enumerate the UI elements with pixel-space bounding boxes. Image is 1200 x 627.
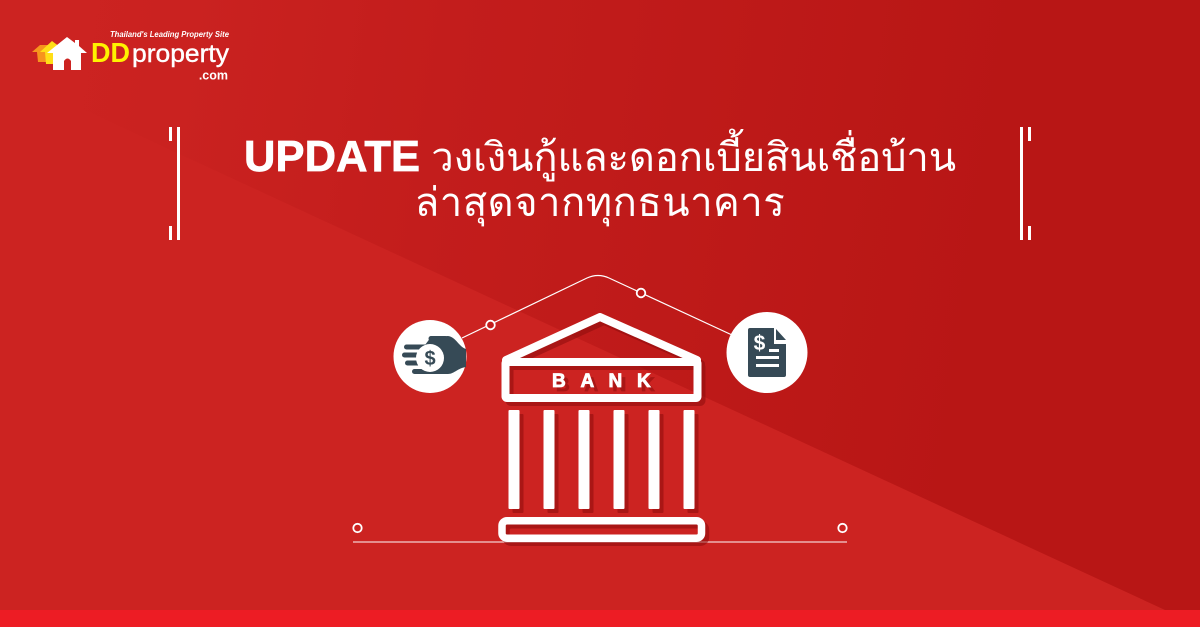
icon: hand with coin: $ [424, 348, 436, 370]
bottom stripe [0, 610, 1200, 627]
icon: houses [32, 37, 87, 70]
title line 2: ล่าสุดจากทุกธนาคาร [415, 181, 785, 225]
icon: document: $ [754, 332, 766, 355]
connector line [462, 276, 732, 338]
title line 1: UPDATE วงเงินกู้และดอกเบี้ยสินเชื่อบ้าน [244, 133, 956, 181]
title [244, 128, 956, 226]
logo [32, 29, 230, 82]
title brackets [169, 127, 1031, 240]
bank label: BANK [552, 371, 651, 392]
bank building [502, 317, 702, 538]
icon: document [726, 312, 808, 393]
logo suffix: .com [199, 68, 228, 82]
columns [508, 410, 694, 509]
logo: property [132, 40, 230, 68]
pediment [506, 317, 697, 360]
logo tagline: Thailand's Leading Property Site [110, 29, 229, 39]
base plinth [502, 521, 702, 538]
ground line [353, 524, 847, 542]
logo wordmark: DD [91, 37, 130, 68]
frieze [506, 362, 698, 398]
icon: hand with coin [394, 320, 466, 393]
